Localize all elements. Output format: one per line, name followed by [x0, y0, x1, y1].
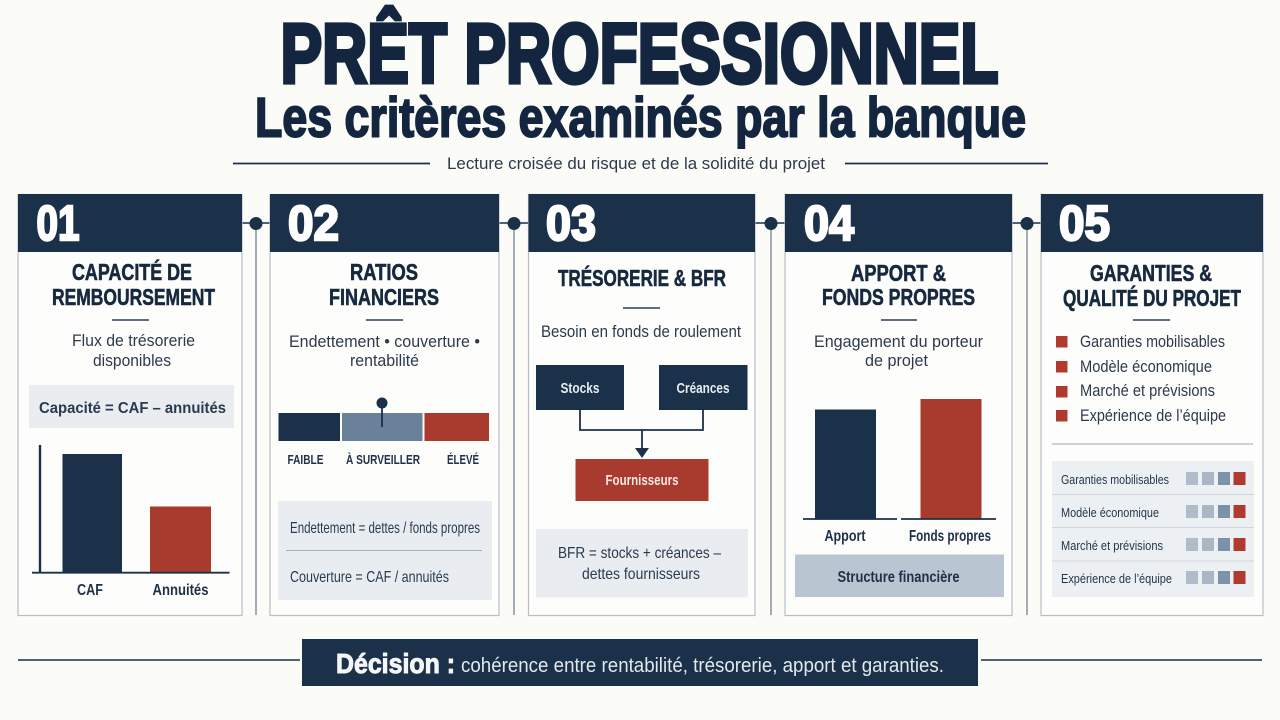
connector 3-4: [755, 217, 785, 615]
panel: trésorerie et BFR: [528, 194, 755, 616]
bar chart: CAF vs annuités: Annuités: [152, 582, 208, 599]
card description: [72, 332, 195, 370]
decision banner: cohérence entre rentabilité, trésorerie, apport et garanties.: [461, 654, 944, 677]
card description: [289, 333, 480, 370]
panel: ratios financiers: [270, 194, 499, 616]
bullet list: Garanties mobilisables: [1080, 333, 1225, 351]
card title: RATIOS: [350, 259, 418, 285]
formula box: Capacité = CAF – annuités: [39, 400, 226, 417]
header 02: [270, 194, 499, 252]
card title: TRÉSORERIE & BFR: [558, 264, 726, 291]
bar chart: CAF vs annuités: [32, 445, 230, 599]
bar chart: apport vs fonds propres: Fonds propres: [909, 528, 991, 545]
formula box: dettes fournisseurs: [582, 566, 700, 583]
bar chart: CAF vs annuités: CAF: [77, 582, 103, 599]
formula box: BFR = stocks + créances –: [558, 545, 721, 562]
subtitle: Les critères examinés par la banque: [255, 86, 1026, 148]
header 05: [1041, 194, 1263, 252]
card description: Besoin en fonds de roulement: [541, 323, 741, 341]
risk gauge: ÉLEVÉ: [447, 452, 479, 467]
formula box: [536, 529, 748, 598]
header 04: [785, 194, 1012, 252]
card title: REMBOURSEMENT: [52, 284, 215, 310]
BFR flow diagram: Fournisseurs: [606, 473, 678, 489]
risk gauge: [278, 398, 489, 467]
bar chart: apport vs fonds propres: [803, 399, 996, 545]
decision banner: [18, 639, 1262, 686]
row: modèle: Modèle économique: [1061, 505, 1159, 520]
formulas box: Endettement = dettes / fonds propres: [290, 520, 480, 537]
BFR flow diagram: Créances: [676, 381, 730, 397]
header 03: [528, 194, 755, 252]
formulas box: Couverture = CAF / annuités: [290, 569, 449, 586]
card description: Endettement • couverture •: [289, 333, 480, 351]
header 02: 02: [288, 197, 339, 251]
panel: apport et fonds propres: [785, 194, 1012, 616]
header 03: 03: [546, 197, 596, 251]
row: expérience: Expérience de l’équipe: [1061, 571, 1172, 586]
BFR flow diagram: [536, 365, 748, 501]
card description: rentabilité: [350, 352, 419, 370]
title: PRÊT PROFESSIONNEL: [280, 6, 998, 100]
connector 4-5: [1012, 217, 1041, 615]
card title: [822, 260, 975, 320]
risk gauge: FAIBLE: [288, 452, 324, 467]
rating table: [1052, 461, 1254, 597]
tagline with rules: Lecture croisée du risque et de la solidité du projet: [447, 154, 825, 173]
connector 1-2: [242, 217, 270, 615]
card description: Flux de trésorerie: [72, 332, 195, 350]
card title: GARANTIES &: [1090, 260, 1212, 286]
row: marché: [1061, 538, 1246, 553]
card title: FINANCIERS: [329, 284, 439, 310]
header 01: [18, 194, 242, 252]
formula box: [29, 385, 234, 428]
card title: [329, 259, 439, 320]
card description: de projet: [865, 352, 928, 370]
header 01: 01: [36, 197, 80, 251]
bullet list: Expérience de l’équipe: [1080, 407, 1226, 425]
header 04: 04: [804, 197, 854, 251]
structure box: [795, 554, 1004, 597]
connector 2-3: [499, 217, 528, 615]
bullet list: Marché et prévisions: [1080, 382, 1215, 400]
row: modèle: [1061, 505, 1246, 520]
decision banner: Décision :: [336, 648, 455, 679]
card title: CAPACITÉ DE: [72, 258, 192, 285]
panel: capacité de remboursement: [18, 194, 242, 616]
bullet list: [1056, 333, 1226, 425]
card title: FONDS PROPRES: [822, 284, 975, 310]
card title: [1063, 260, 1241, 320]
formulas box: [278, 501, 492, 600]
BFR flow diagram: Stocks: [560, 381, 600, 397]
panel: garanties et qualité du projet: [1041, 194, 1263, 616]
header 05: 05: [1059, 197, 1110, 251]
structure box: Structure financière: [838, 569, 960, 586]
card description: Engagement du porteur: [814, 333, 983, 351]
card description: disponibles: [93, 352, 171, 370]
card description: [814, 333, 983, 370]
card title: [52, 258, 215, 320]
row: marché: Marché et prévisions: [1061, 538, 1163, 553]
bullet list: Modèle économique: [1080, 358, 1212, 376]
row: garanties: Garanties mobilisables: [1061, 472, 1169, 487]
risk gauge: À SURVEILLER: [346, 452, 420, 467]
bar chart: apport vs fonds propres: Apport: [824, 528, 866, 545]
card title: APPORT &: [851, 260, 946, 286]
